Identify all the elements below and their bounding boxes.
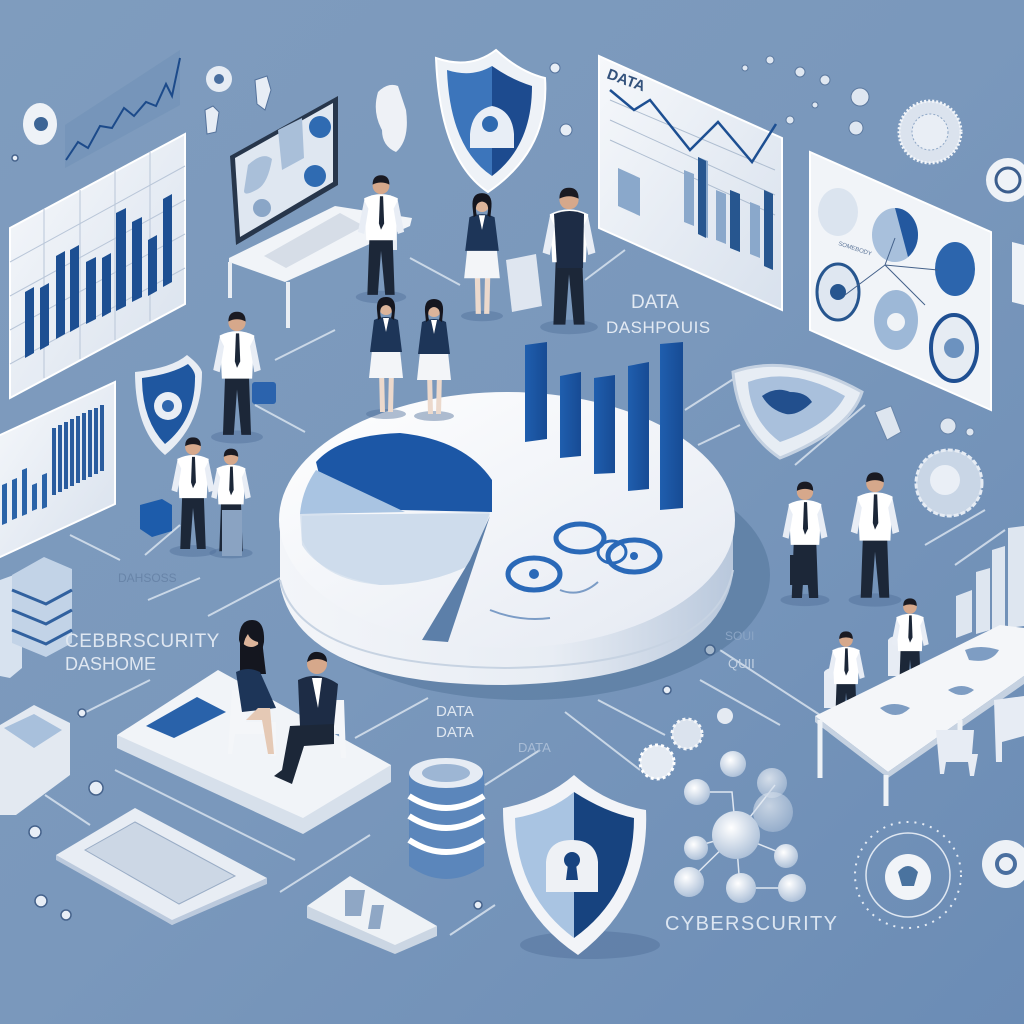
paper stacks left — [0, 557, 72, 678]
server icon — [252, 382, 276, 404]
right panel with circles — [810, 152, 991, 410]
heading: cybersecurity: CYBERSCURITY — [665, 913, 837, 935]
heading: data dashboards: DASHPOUIS — [606, 318, 711, 337]
icon: right edge tall panel — [1012, 242, 1024, 305]
icon: gear globe — [916, 450, 982, 516]
left pair of people — [169, 437, 253, 558]
network nodes — [640, 708, 806, 903]
heading: data data: DATA — [518, 740, 551, 755]
bars — [525, 342, 683, 510]
heading: cybersecurity dashboard: DAHSOSS — [118, 571, 177, 585]
slice gap — [422, 516, 490, 642]
data panel top right — [599, 56, 782, 310]
heading: data dashboards: DATA — [631, 292, 679, 313]
heading: data data — [436, 629, 755, 755]
icon: blue cube — [140, 499, 172, 537]
seated woman — [236, 620, 276, 754]
icon: fingerprint globe — [899, 101, 961, 163]
platform with seated people — [117, 620, 391, 834]
blocks on floor — [307, 876, 437, 954]
right panel with circles: SOMEBODY — [837, 241, 872, 258]
panel: left mid chart — [0, 382, 115, 558]
central pie platform — [279, 342, 770, 700]
heading: data data: QUII — [728, 656, 755, 671]
chart panel: left bar chart — [10, 134, 185, 398]
doc on floor — [56, 808, 267, 925]
seated man — [274, 652, 338, 784]
shield: right of pie — [733, 365, 862, 458]
heading: data data: DATA — [436, 724, 474, 741]
line chart top left — [65, 50, 180, 168]
heading: cybersecurity dashboard: DASHOME — [65, 654, 156, 674]
meeting table group — [815, 598, 1024, 806]
data panel top right: DATA — [605, 66, 648, 95]
heading: cybersecurity dashboard: CEBBRSCURITY — [65, 631, 220, 652]
shield: left — [135, 355, 202, 455]
heading: cybersecurity dashboard — [65, 571, 220, 674]
person at desk — [356, 175, 406, 303]
pie segment: pale — [300, 514, 490, 585]
central couple standing on the pie — [366, 297, 454, 421]
icon: right edge swirl — [986, 158, 1024, 202]
handshake figures — [781, 472, 901, 607]
heading: data data: SOUI — [725, 629, 754, 643]
pie segment: dark blue — [316, 433, 492, 512]
database cylinder — [409, 758, 484, 879]
standing man left — [211, 312, 263, 443]
cluster of icons top right — [742, 56, 869, 135]
cluster: small icons right of pie — [875, 406, 974, 440]
heading: data dashboards — [606, 292, 711, 337]
heading: data data: DATA — [436, 703, 474, 720]
pie segment: light wedge — [300, 470, 405, 514]
connector lines and small nodes — [45, 250, 1005, 935]
bars right edge — [956, 526, 1024, 638]
icon: radial lock burst — [855, 822, 961, 928]
icon: ring bottom right — [982, 840, 1024, 888]
shield: top centre — [436, 50, 545, 192]
dark suit overlay — [554, 211, 584, 268]
desk with keyboard — [229, 206, 412, 328]
people conversing top centre — [461, 188, 598, 334]
shield: bottom centre lock — [503, 775, 660, 959]
small scattered icons top — [205, 63, 572, 152]
monitor panel — [230, 96, 338, 245]
ring icons — [490, 524, 660, 619]
small round badge — [206, 66, 232, 92]
stack box bottom left — [0, 705, 70, 815]
icon: round badge top left — [23, 103, 57, 145]
